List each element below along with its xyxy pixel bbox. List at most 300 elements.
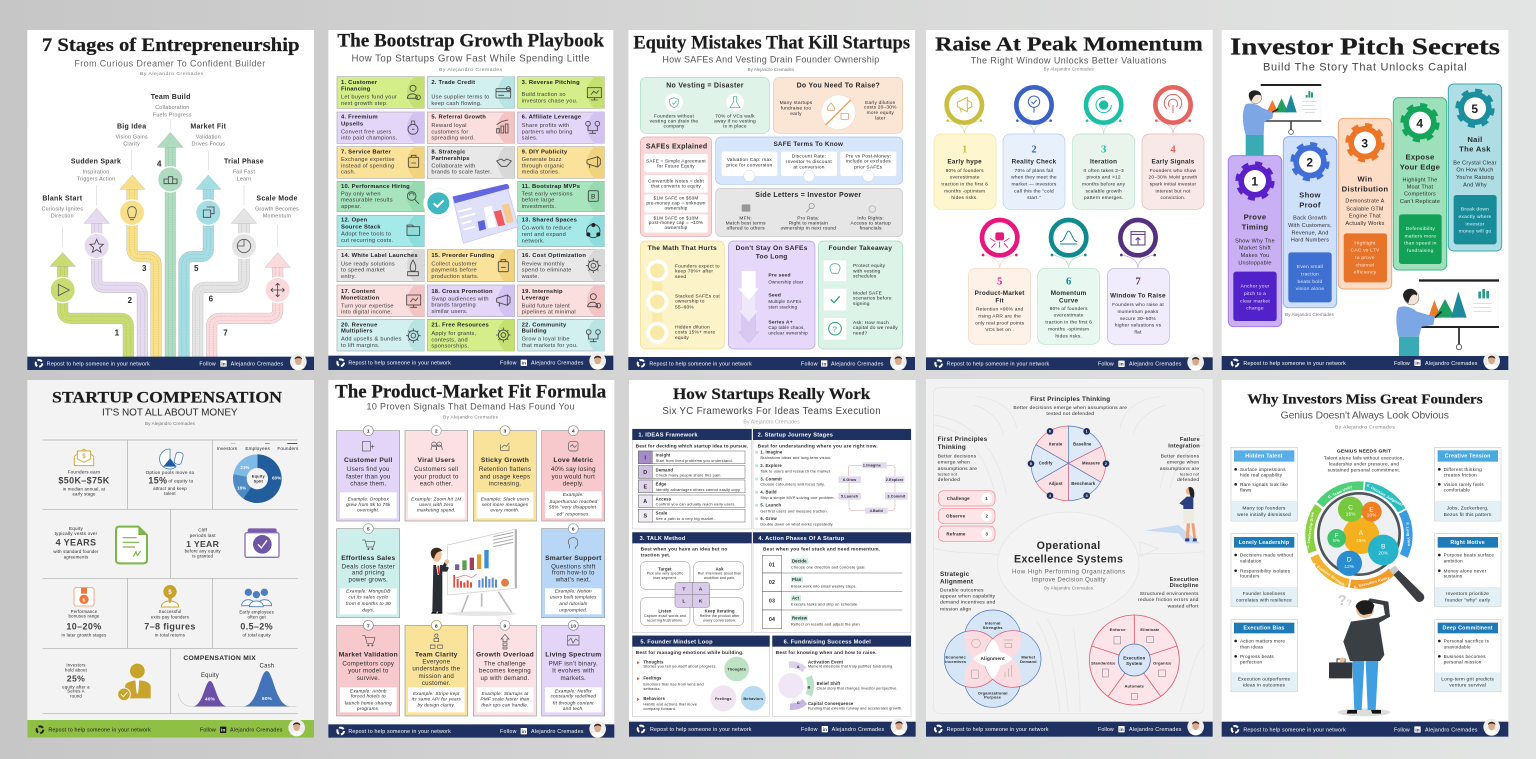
stage labels: Fuels Progress — [153, 112, 192, 118]
tile 10: measurable results — [341, 198, 393, 204]
center title block: How High Performing Organizations — [1012, 568, 1125, 575]
box: Creative Tension: Jobs, Zuckerberg, — [1447, 505, 1489, 511]
signal 6: Questions shift — [551, 564, 596, 571]
subtitle: Build The Story That Unlocks Capital — [1263, 62, 1467, 74]
footer — [1222, 353, 1508, 370]
stat: investors — [62, 663, 151, 701]
signal 10: Example: Netflix — [555, 688, 592, 693]
ring of six traits: A. Execution Ability — [1353, 576, 1391, 589]
magnifying glass with bubble chart: 12% — [1344, 564, 1354, 569]
signal 6: 6 — [572, 527, 575, 533]
footer: in — [1415, 727, 1420, 732]
panel: Do You Need To Raise?: Early dilution — [865, 100, 896, 106]
stat: investors: round — [70, 693, 82, 698]
signal 5: Deals close faster — [342, 564, 395, 571]
panel 2: Startup Journey Stages: Best for understanding where you are right now. — [758, 443, 878, 449]
panel 2: Startup Journey Stages: 3.Commit — [887, 494, 906, 498]
panel: Founder Takeaway — [818, 241, 903, 349]
tile 13: Co-work to reduce — [522, 226, 572, 232]
signal 5 — [337, 524, 400, 618]
panel: The Math That Hurts: Stacked SAFEs cut — [675, 294, 720, 300]
stage 3: Iteration: scalable growth — [1085, 188, 1122, 194]
stat: vesting — [53, 526, 147, 563]
signal 4: Love Metric — [553, 457, 593, 464]
stage numbers: 7 — [223, 329, 228, 338]
signal 9: PMF scale faster than — [480, 697, 530, 702]
strategic alignment text — [940, 571, 996, 612]
magnifying glass with bubble chart: 20% — [1378, 550, 1388, 555]
stage labels: Triggers Action — [77, 176, 115, 182]
footer: Follow — [1098, 727, 1114, 733]
column 3: Win Distribution: Demonstrate A — [1345, 199, 1385, 205]
chart: six-step wheel: 2 — [1105, 462, 1107, 466]
tile 4: Convert free users — [341, 129, 392, 135]
magnifying glass with bubble chart: F — [1334, 533, 1339, 540]
panel: Side Letters = Investor Power: Pro Rata: — [797, 215, 819, 221]
panel: Founder Takeaway: Ask: How much — [853, 320, 889, 326]
panel 1: IDEAS Framework: Scale — [656, 511, 668, 516]
ring of six traits: D. Team Unity — [1328, 484, 1354, 499]
signal 8: Team Clarity — [415, 652, 458, 659]
panel: Do You Need To Raise?: costs 20–30% — [864, 105, 897, 111]
panel: No Vesting = Disaster: away if no vesting — [714, 118, 756, 124]
tile 1: Financing — [341, 87, 371, 93]
panel 2: Startup Journey Stages: 1.Imagine — [863, 464, 881, 468]
footer: Repost to help someone in your network — [947, 727, 1049, 733]
signal 6: from how-to to — [552, 569, 595, 576]
signal 1: faster than you — [346, 473, 391, 480]
box: Deep Commitment: Long-term grit predicts — [1441, 677, 1494, 683]
donut chart: equity split: 60% — [272, 476, 281, 481]
stage 7: Window To Raise: flat — [1134, 330, 1142, 336]
column 3: Win Distribution: 3 — [1361, 136, 1369, 150]
footer — [328, 353, 613, 370]
tile 19: Leverage — [522, 296, 550, 302]
signal 7: Market Validation — [339, 652, 398, 659]
stage 1: Early hype: months -optimism — [944, 188, 985, 194]
stat: bonuses: in later growth stages — [62, 633, 106, 638]
column 5: Nail The Ask: You're Raising — [1456, 175, 1494, 181]
stat: investors: hold about — [65, 668, 88, 673]
column 1: Prove Timing: Timing — [1242, 223, 1268, 232]
tile 21: contests, and — [431, 337, 468, 343]
footer: Follow — [200, 728, 216, 734]
column 1: Prove Timing: clear market — [1240, 298, 1270, 304]
stat: option pool — [146, 449, 195, 496]
tile 5: Reward loyal — [431, 123, 467, 129]
footer: Follow — [500, 361, 517, 367]
panel: Side Letters = Investor Power — [716, 188, 903, 237]
tile 4: Upsells — [341, 121, 363, 127]
column 3: Win Distribution: Distribution — [1342, 184, 1388, 193]
tile 10 — [337, 181, 424, 212]
execution system wheel: Organize — [1153, 660, 1172, 665]
footer: in — [1119, 362, 1124, 367]
center title block: Operational — [1037, 540, 1101, 552]
column 4: Expose Your Edge: Expose — [1405, 152, 1435, 161]
byline: By Alejandro Cremades — [743, 420, 800, 426]
execution discipline text — [1138, 577, 1199, 610]
pills: challenge observe reframe: Challenge — [947, 496, 970, 501]
tile 19: pipelines at minimal — [522, 310, 576, 316]
column 1: Prove Timing: change — [1246, 305, 1264, 311]
stat: founder exits: Successful — [159, 609, 181, 614]
tile 16 — [518, 250, 604, 282]
footer: Repost to help someone in your network — [1243, 727, 1346, 733]
tile 22: Grow a loyal tribe — [522, 337, 570, 343]
panel 2: Startup Journey Stages: Get first users and measure traction. — [760, 509, 828, 513]
strategic alignment text: appear when capability — [940, 594, 996, 600]
right text block: defended — [1177, 477, 1199, 483]
column 1: Prove Timing: Anchor your — [1240, 283, 1270, 289]
stage 3: Iteration: pivots and >12 — [1087, 175, 1121, 181]
column 3: Win Distribution: channel — [1356, 262, 1374, 268]
stage labels: Scale Mode — [256, 196, 298, 203]
panel: Do You Need To Raise?: fundraise too — [781, 106, 811, 112]
stage numbers: 5 — [194, 264, 199, 273]
box: Deep Commitment: Deep Commitment — [1443, 626, 1493, 632]
stat: bonuses: bonuses range — [69, 614, 100, 619]
panel: Side Letters = Investor Power: MFN: — [739, 215, 752, 221]
box: Creative Tension: comfortable — [1444, 488, 1470, 493]
strategic alignment text: Strategic — [940, 571, 970, 578]
tile 14: Use ready solutions — [341, 261, 395, 267]
signal 9: becomes keeping — [479, 668, 531, 675]
chart: six-step wheel: Codify — [1039, 461, 1053, 466]
panel: Side Letters = Investor Power: offered to others — [726, 226, 765, 232]
column 5: Nail The Ask: And Why — [1463, 182, 1487, 188]
title: Investor Pitch Secrets — [1230, 34, 1500, 60]
signal 7: your model to — [348, 668, 389, 675]
panel: Don't Stay On SAFEs Too Long: start stacking — [768, 305, 798, 310]
stage 3: Iteration: It often takes 2–3 — [1083, 168, 1124, 174]
tile 18: similar users. — [431, 309, 468, 315]
panel 4: Action Phases Of A Startup: Reflect on results and adjust the plan. — [791, 623, 861, 627]
column 5: Nail The Ask: The Ask — [1459, 145, 1491, 154]
panel 3: TALK Method: Ask — [716, 566, 724, 571]
panel 6: Fundraising Success Model: Clear story that changes investor perspective. — [817, 687, 898, 691]
box: Hidden Talent: Hidden Talent — [1245, 454, 1283, 460]
tile 13 — [518, 215, 604, 247]
tile 22: 22. Community — [522, 322, 567, 328]
panel 3: TALK Method: L — [682, 598, 686, 604]
tile 3: 3. Reverse Pitching — [522, 80, 580, 86]
footer: Alejandro Cremades — [531, 729, 584, 735]
panel 3: TALK Method — [632, 532, 752, 632]
panel: Don't Stay On SAFEs Too Long: Don't Stay On SAFEs — [736, 245, 808, 252]
box: Right Motive: founder "why" early — [1445, 598, 1491, 604]
stage 4: Early Signals: 20–30% MoM growth — [1149, 175, 1198, 181]
panel 4: Action Phases Of A Startup: 4. Action Phases Of A Startup — [758, 536, 845, 542]
panel: The Math That Hurts: seed — [675, 274, 686, 280]
column 4: Expose Your Edge: Your Edge — [1400, 162, 1440, 171]
stage 3: Iteration: 3 — [1101, 144, 1106, 155]
stage labels: Team Build — [151, 94, 191, 101]
tile 20: Multipliers — [341, 329, 373, 335]
box: Lonely Leadership: Decisions made without — [1240, 553, 1294, 558]
column 1: Prove Timing: Show Why The — [1235, 238, 1275, 244]
signal 3: every month. — [490, 508, 520, 513]
title: The Product-Market Fit Formula — [335, 382, 607, 403]
tile 7: instead of spending — [341, 163, 394, 169]
stage labels: Vision Gains — [115, 134, 148, 140]
signal 10: fit through content — [553, 700, 594, 705]
tile 10: 10. Performance Hiring — [341, 184, 410, 190]
footer: Follow — [1394, 727, 1410, 733]
panel 2: Startup Journey Stages: 4. Build — [760, 490, 777, 495]
left text block: First Principles — [938, 436, 988, 443]
panel 6: Fundraising Success Model: Belief Shift — [817, 681, 841, 686]
panel 2: Startup Journey Stages: 4.Build — [870, 509, 883, 513]
signal 6 — [542, 524, 605, 618]
chart: six-step wheel: 3 — [1086, 494, 1088, 498]
stage 2: Reality Check: 70% of plans fail — [1015, 168, 1053, 174]
byline: By Alejandro Cremades — [439, 67, 503, 73]
stage 7: Window To Raise — [1107, 220, 1169, 344]
panel: Founder Takeaway: with vesting — [853, 268, 881, 274]
stat: cliff: Cliff — [198, 528, 208, 533]
signal 7: launch home-sharing — [345, 700, 392, 705]
panel 2: Startup Journey Stages: Talk to users and research the market. — [760, 469, 831, 473]
tile 21: sponsorships. — [431, 344, 469, 350]
box: Creative Tension: Creative Tension — [1445, 454, 1491, 460]
venn diagram: Strengths — [983, 625, 1003, 630]
tile 1: 1. Customer — [341, 80, 378, 86]
footer — [628, 353, 915, 370]
donut chart: equity split: 18% — [237, 485, 246, 490]
signal 9: The challenge — [484, 660, 526, 667]
tile 2 — [427, 77, 515, 108]
tile 8 — [427, 147, 515, 178]
strategic alignment text: demand incentives and — [940, 600, 995, 606]
tile 7: Exchange expertise — [341, 157, 395, 163]
stage numbers: 2 — [128, 296, 133, 305]
chart: six-step wheel: Baseline — [1073, 442, 1092, 447]
right text block: Better decisions — [1161, 454, 1200, 460]
tile 18: 18. Cross Promotion — [431, 289, 493, 295]
subtitle: The Right Window Unlocks Better Valuations — [971, 55, 1167, 65]
stage 4: Early Signals: conviction. — [1161, 195, 1185, 201]
signal 10: PMF isn't binary. — [549, 660, 598, 667]
execution system wheel: Execution — [1123, 655, 1146, 660]
box: Hidden Talent: hide real capability — [1240, 473, 1283, 478]
stage 5: Product-Market Fit: 5 — [997, 276, 1002, 287]
tile 5 — [427, 112, 515, 143]
tile 8: 8. Strategic — [431, 149, 466, 155]
stage labels: Clarity — [123, 141, 140, 147]
card: Raise At Peak Momentum — [926, 30, 1213, 371]
tile 22: that markets for you. — [522, 343, 578, 349]
panel 5: Founder Mindset Loop: Feelings — [643, 675, 662, 680]
column 3: Win Distribution: Scalable GTM — [1346, 206, 1384, 212]
box: Right Motive: Right Motive — [1450, 540, 1485, 546]
box: Execution Bias: ideas in outcomes — [1243, 683, 1285, 689]
panel: Side Letters = Investor Power: Right to maintain — [789, 220, 828, 226]
footer: Alejandro Cremades — [1129, 727, 1182, 733]
stat: option pool: Option pools move so — [146, 470, 195, 475]
tile 6: 6. Affiliate Leverage — [522, 115, 582, 121]
box: Hidden Talent: were initially dismissed — [1237, 512, 1291, 518]
panel: Don't Stay On SAFEs Too Long: Multiple SAFEs — [768, 299, 802, 304]
panel: SAFEs Explained — [640, 137, 712, 237]
card: Startup Compensation — [27, 380, 314, 738]
panel 3: TALK Method: Run interviews about their — [698, 572, 742, 576]
footer: Repost to help someone in your network — [47, 361, 150, 367]
panel 1: IDEAS Framework: Confirm you can actually reach early users. — [656, 503, 736, 507]
panel: Side Letters = Investor Power: financials — [860, 226, 882, 232]
panel 4: Action Phases Of A Startup: Best when you feel stuck and need momentum. — [763, 547, 881, 553]
stat: early employees — [239, 589, 274, 638]
panel 6: Fundraising Success Model: B — [807, 685, 811, 690]
tile 22 — [518, 319, 604, 351]
signal 8: mission and — [419, 673, 454, 680]
panel: Side Letters = Investor Power: Info Rights: — [857, 215, 884, 221]
panel 2: Startup Journey Stages: 6. Grow — [760, 516, 777, 521]
column 3: Win Distribution: Engine That — [1349, 214, 1381, 220]
center title block: Excellence Systems — [1014, 554, 1123, 566]
tile 10: appear. — [341, 204, 362, 210]
panel: Side Letters = Investor Power: Side Letters = Investor Power — [755, 192, 861, 199]
stage labels: Growth Becomes — [255, 207, 299, 213]
tile 6: partners who bring — [522, 129, 573, 135]
signal 1: Users find you — [347, 466, 390, 473]
signal 3: and usage keeps — [480, 473, 530, 480]
card: Investor Pitch Secrets — [1222, 30, 1508, 370]
signal 2: 2 — [435, 429, 438, 435]
panel: The Math That Hurts: 55–60% — [675, 304, 694, 310]
signal 10: Living Spectrum — [545, 652, 601, 659]
stage 5: Product-Market Fit: Retention >90% and — [976, 306, 1023, 312]
box: Hidden Talent: Surface impressions — [1240, 467, 1286, 472]
tile 17: 17. Content — [341, 289, 375, 295]
signal 5: from 6 months to 30 — [346, 601, 391, 606]
box: Right Motive — [1435, 534, 1501, 607]
signal 2: each other. — [420, 481, 453, 488]
column 4: Expose Your Edge: Competitors — [1404, 192, 1436, 198]
tile 14: 14. White Label Launches — [341, 253, 418, 259]
signal 5: Effortless Sales — [341, 555, 395, 562]
column 4: Expose Your Edge: than speed in — [1404, 241, 1437, 247]
signal 3: Example: Slack users — [481, 496, 530, 501]
venn diagram: Alignment — [980, 656, 1005, 661]
column 4: Expose Your Edge: Moat That — [1407, 184, 1434, 190]
magnifying glass with bubble chart: A — [1359, 530, 1364, 537]
tile 2: keep cash flowing. — [431, 101, 482, 107]
panel 5: Founder Mindset Loop: Feelings — [715, 697, 732, 701]
tile 2: Use supplier terms to — [431, 95, 490, 101]
panel: Founder Takeaway: Founder Takeaway — [828, 245, 892, 252]
tile 6 — [518, 112, 604, 143]
signal 6: and tutorials — [559, 601, 588, 606]
panel: SAFE Terms To Know: prior SAFEs — [854, 164, 883, 170]
panel: Side Letters = Investor Power: Match best terms — [726, 220, 766, 226]
box: Execution Bias: perfection — [1240, 660, 1263, 665]
panel 2: Startup Journey Stages: Brainstorm ideas and long-term vision. — [760, 456, 831, 460]
footer: Follow — [1394, 361, 1410, 367]
stage 5: Product-Market Fit — [968, 220, 1031, 344]
stat: bonuses — [62, 588, 106, 638]
column 5: Nail The Ask: investor — [1465, 221, 1485, 227]
magnifying glass with bubble chart: D — [1347, 557, 1352, 564]
execution system wheel: Automate — [1125, 684, 1145, 689]
right text block: emerge when — [1167, 460, 1199, 466]
subtitle: How SAFEs And Vesting Drain Founder Ownership — [662, 55, 880, 65]
signal 8: understands the — [412, 666, 461, 673]
stage 6: Momentum Curve: months -optimism — [1048, 326, 1089, 332]
thinking person illustration — [1329, 593, 1390, 716]
box: Deep Commitment: venture survival — [1449, 683, 1486, 689]
panel 3: TALK Method: Capture exact words and — [644, 614, 686, 618]
card: How Startups Really Work — [629, 380, 916, 737]
top heading: tested not defended — [1046, 411, 1094, 417]
magnifying glass with bubble chart: E — [1369, 507, 1374, 514]
footer — [629, 718, 916, 737]
column 3: Win Distribution: Actually Works — [1345, 221, 1385, 227]
panel 3: TALK Method: K — [699, 598, 703, 604]
chart: six-step wheel: 4 — [1049, 494, 1052, 498]
footer: Follow — [199, 361, 216, 367]
signal 10: It evolves with — [552, 668, 595, 675]
panel 3: TALK Method: Refine the product after — [700, 614, 740, 618]
panel: Do You Need To Raise?: Do You Need To Raise? — [797, 82, 880, 89]
tile 17 — [337, 285, 424, 317]
signal 2: marketing spend. — [417, 508, 456, 513]
stage 2: Reality Check: when they meet the — [1011, 175, 1057, 181]
donut chart: equity split: 21% — [240, 465, 250, 470]
chart: six-step wheel: Iterate — [1049, 442, 1063, 447]
column 4: Expose Your Edge: Highlight The — [1402, 178, 1438, 184]
signal 7: Competitors copy — [342, 660, 395, 667]
signal 6: Smarter Support — [545, 555, 602, 562]
stat: vesting: with standard founder — [53, 549, 99, 554]
column 2: Show Proof: Back Growth — [1293, 216, 1327, 222]
tile 3 — [518, 77, 604, 108]
tile 9: Generate buzz — [522, 157, 562, 163]
execution discipline text: Discipline — [1170, 583, 1199, 589]
column 4: Expose Your Edge — [1393, 98, 1447, 270]
signal 2 — [405, 426, 468, 521]
center heading: GENIUS NEEDS GRIT — [1337, 448, 1391, 454]
stage numbers — [115, 160, 228, 338]
column 3: Win Distribution: Win — [1358, 175, 1372, 184]
column 2: Show Proof: 2 — [1306, 155, 1314, 169]
signal 6: what's next. — [555, 577, 591, 584]
panel 2: Startup Journey Stages: 2. Startup Journey Stages — [758, 433, 833, 439]
center title block: By Alejandro Cremades — [1044, 586, 1093, 591]
tile 9: media stories. — [522, 170, 560, 176]
arrow road 6: Trial Phase — [198, 208, 257, 358]
footer: Follow — [1098, 362, 1114, 368]
stat: investors: 25% — [67, 674, 85, 684]
footer — [27, 353, 314, 370]
execution discipline text: reduce friction errors and — [1138, 597, 1199, 603]
footer: Repost to help someone in your network — [348, 361, 451, 367]
tile 13: rent and expand — [522, 232, 566, 238]
stage labels: Learn — [237, 176, 251, 182]
stage 6: Momentum Curve: Curve — [1059, 297, 1078, 304]
tile 20: Add upsells & bundles — [341, 337, 402, 343]
tile 11: before large — [522, 198, 555, 204]
tile 2: 2. Trade Credit — [431, 80, 475, 86]
panel: SAFEs Explained: ownership — [665, 225, 688, 230]
right text block: Failure — [1180, 437, 1200, 443]
footer: in — [522, 361, 526, 366]
panel 6: Fundraising Success Model: A — [797, 664, 800, 669]
panel 5: Founder Mindset Loop: Habits and actions that move — [643, 703, 697, 707]
venn diagram: Demand — [1020, 659, 1037, 664]
footer: Repost to help someone in your network — [947, 362, 1049, 368]
arrow road 4: Team Build — [157, 132, 183, 358]
